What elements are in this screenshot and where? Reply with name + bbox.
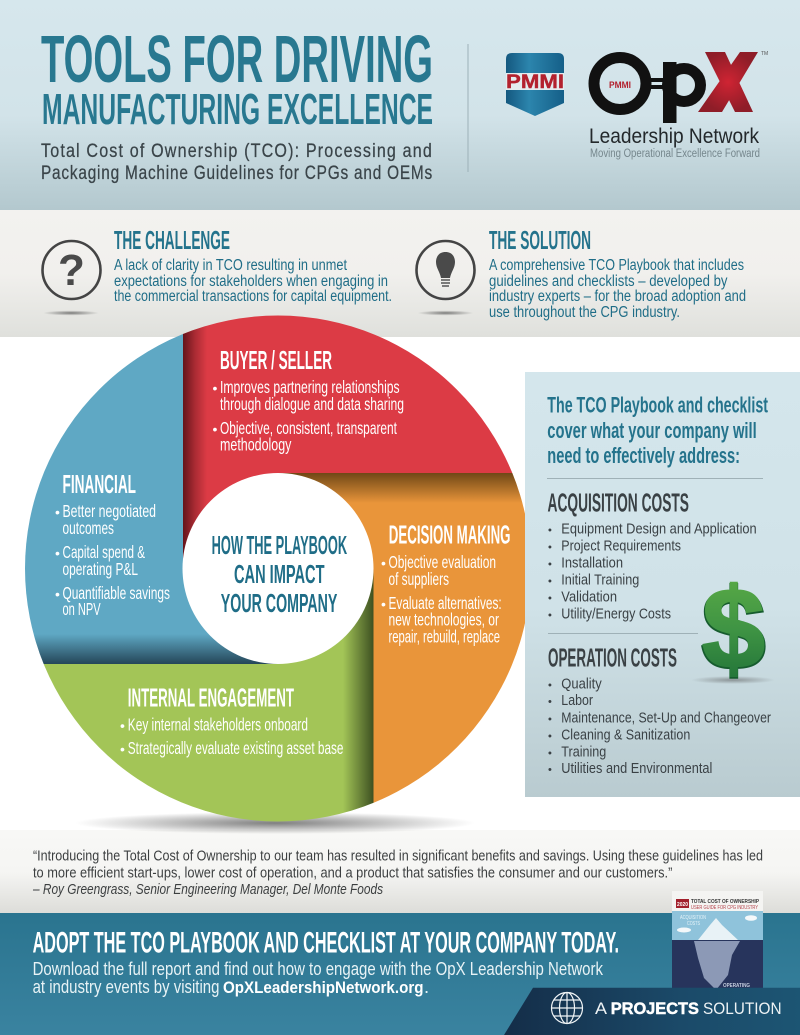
text: financial: Quantifiable savings [62, 583, 170, 603]
report cover: ACQUISITION [680, 915, 706, 921]
text: internal engagement: Strategically evaluate existing asset base [128, 738, 344, 758]
acquisition costs: • [548, 541, 552, 553]
operation costs: • [548, 679, 552, 691]
the challenge: expectations for stakeholders when engaging in [114, 273, 388, 290]
quote: – Roy Greengrass, Senior Engineering Manager, Del Monte Foods [32, 881, 383, 898]
icon: dollar sign: $ [702, 566, 765, 692]
panel: playbook costs [525, 372, 800, 797]
pinwheel chart [25, 316, 525, 822]
logo: OpX Leadership Network: Leadership Network [589, 125, 759, 148]
text: buyer seller: through dialogue and data sharing [220, 394, 404, 414]
the solution: guidelines and checklists – developed by [489, 273, 728, 290]
center circle: YOUR COMPANY [221, 590, 337, 618]
segment: internal engagement [44, 570, 374, 822]
text: buyer seller: methodology [220, 435, 292, 455]
operation costs [548, 643, 771, 777]
center circle [182, 473, 374, 664]
icon: light bulb [416, 241, 474, 316]
text: decision making: of suppliers [388, 569, 449, 589]
center circle: CAN IMPACT [234, 561, 325, 589]
acquisition costs: • [548, 575, 552, 587]
call to action: . [424, 976, 429, 997]
panel heading [547, 393, 768, 468]
report cover: TOTAL COST OF OWNERSHIP [691, 899, 759, 905]
title: TOOLS FOR DRIVING [41, 22, 433, 97]
circle shadow [75, 812, 475, 834]
operation costs: • [548, 730, 552, 742]
text: financial: Capital spend & [62, 542, 145, 562]
logo: OpX Leadership Network: PMMI [609, 80, 631, 90]
icon: question mark [42, 241, 100, 316]
acquisition costs [548, 488, 757, 622]
projects solution badge: SOLUTION [703, 999, 782, 1018]
acquisition costs: Validation [561, 590, 617, 606]
subtitle: Packaging Machine Guidelines for CPGs and OEMs [41, 162, 433, 184]
icon: question mark: ? [58, 246, 85, 295]
text: financial: outcomes [62, 518, 114, 538]
operation costs: Training [561, 744, 606, 760]
text: buyer seller: • [212, 421, 218, 437]
acquisition costs: • [548, 558, 552, 570]
text: internal engagement: • [120, 718, 125, 734]
quote band [0, 830, 800, 914]
text: internal engagement: • [120, 741, 125, 757]
call to action: Download the full report and find out how to engage with the OpX Leadership Network [33, 958, 604, 979]
text: decision making [381, 522, 510, 647]
projects solution badge: PROJECTS [611, 999, 699, 1018]
icon: dollar sign: $ [701, 567, 766, 694]
text: financial: • [55, 504, 60, 520]
projects solution badge: A [595, 999, 608, 1018]
acquisition costs: • [548, 610, 552, 622]
segment: decision making [278, 473, 525, 803]
the challenge [114, 227, 392, 305]
quote [32, 848, 763, 898]
report cover [672, 891, 763, 991]
title: MANUFACTURING EXCELLENCE [42, 86, 433, 134]
operation costs: • [548, 747, 552, 759]
subtitle [41, 140, 433, 184]
acquisition costs: • [548, 592, 552, 604]
text: financial: • [55, 586, 60, 602]
text: buyer seller [212, 347, 404, 455]
the solution [489, 227, 746, 321]
text: buyer seller: Objective, consistent, transparent [220, 418, 397, 438]
text: internal engagement: Key internal stakeholders onboard [128, 715, 308, 735]
report cover: OPERATING [723, 983, 750, 989]
the solution: A comprehensive TCO Playbook that includes [489, 257, 744, 274]
acquisition costs: Installation [561, 555, 623, 571]
text: buyer seller: Improves partnering relationships [220, 377, 400, 397]
the challenge: THE CHALLENGE [114, 227, 230, 255]
logo: PMMI shield [506, 53, 564, 116]
segment: financial [25, 334, 278, 664]
icon: globe [552, 992, 582, 1024]
operation costs: Utilities and Environmental [561, 761, 712, 777]
text: financial: operating P&L [62, 559, 138, 579]
operation costs: • [548, 696, 552, 708]
call to action [33, 927, 619, 997]
logo: OpX Leadership Network: TM [761, 51, 768, 57]
report cover: COSTS [687, 921, 700, 927]
operation costs: • [548, 713, 552, 725]
text: decision making: Objective evaluation [388, 552, 496, 572]
text: financial: • [55, 545, 60, 561]
title [41, 22, 433, 134]
logo: PMMI shield: PMMI [506, 72, 564, 93]
text: buyer seller: BUYER / SELLER [220, 347, 332, 375]
text: decision making: DECISION MAKING [389, 522, 510, 550]
acquisition costs: Project Requirements [561, 538, 681, 554]
text: financial: Better negotiated [62, 501, 156, 521]
the challenge: A lack of clarity in TCO resulting in unmet [114, 257, 348, 274]
text: decision making: Evaluate alternatives: [388, 593, 502, 613]
the solution: use throughout the CPG industry. [489, 304, 680, 321]
projects solution badge [504, 988, 800, 1035]
subtitle: Total Cost of Ownership (TCO): Processing and [41, 140, 433, 162]
text: financial: FINANCIAL [62, 471, 136, 499]
center circle: HOW THE PLAYBOOK [212, 532, 347, 560]
operation costs: Quality [561, 676, 602, 692]
report cover: USER GUIDE FOR CPG INDUSTRY [691, 905, 758, 911]
text: buyer seller: • [212, 380, 218, 396]
text: decision making: repair, rebuild, replace [388, 627, 500, 647]
text: decision making: new technologies, or [388, 610, 499, 630]
logo: OpX Leadership Network: Moving Operational Excellence Forward [590, 148, 760, 160]
text: financial: on NPV [62, 599, 101, 619]
call to action: at industry events by visiting [33, 976, 219, 997]
the solution: THE SOLUTION [489, 227, 591, 255]
operation costs: • [548, 764, 552, 776]
acquisition costs: Utility/Energy Costs [561, 606, 671, 622]
header band [0, 0, 800, 210]
operation costs: Labor [561, 693, 593, 709]
operation costs: OPERATION COSTS [548, 643, 677, 673]
acquisition costs: Initial Training [561, 572, 639, 588]
quote: to more efficient start-ups, lower cost of operation, and a product that satisfies the consumer and our customers.” [33, 864, 672, 881]
report cover: 2020 [677, 902, 688, 908]
footer band [0, 913, 800, 1035]
text: decision making: • [381, 596, 386, 612]
segment: buyer seller [183, 316, 512, 558]
the solution: industry experts – for the broad adoption and [489, 288, 746, 305]
acquisition costs: Equipment Design and Application [561, 521, 757, 537]
the challenge: the commercial transactions for capital equipment. [114, 288, 392, 305]
text: financial [55, 471, 170, 619]
acquisition costs: • [548, 524, 552, 536]
challenge and solution band [0, 210, 800, 337]
text: internal engagement [120, 685, 344, 758]
operation costs: Cleaning & Sanitization [561, 727, 690, 743]
text: decision making: • [381, 555, 386, 571]
text: internal engagement: INTERNAL ENGAGEMENT [128, 685, 294, 713]
logo: OpX Leadership Network [589, 51, 768, 160]
call to action: OpXLeadershipNetwork.org [223, 978, 424, 997]
